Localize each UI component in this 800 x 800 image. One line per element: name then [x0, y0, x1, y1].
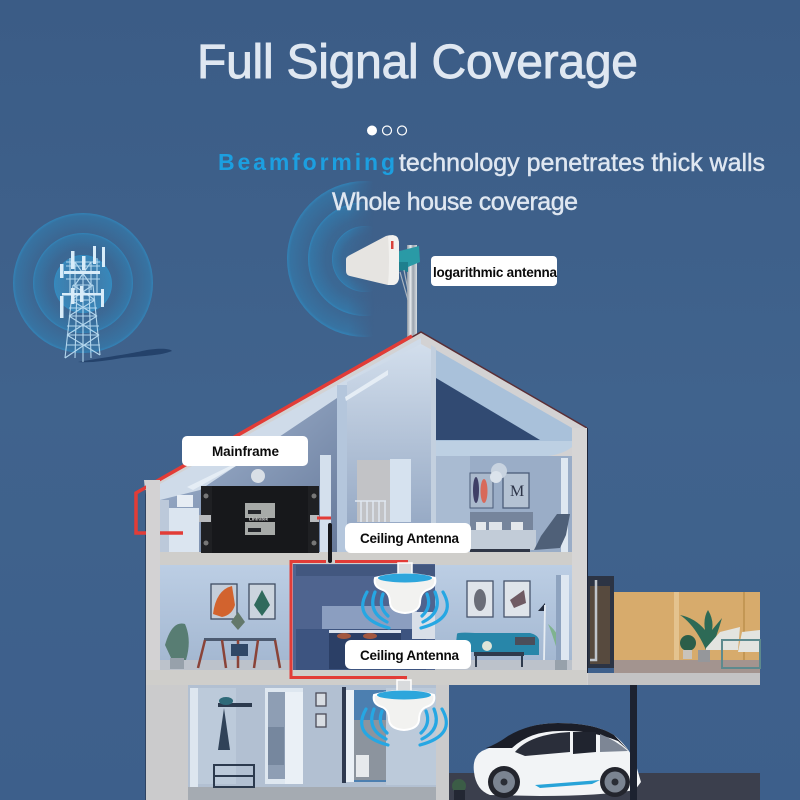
icon: cell tower with signal rings: [13, 213, 172, 362]
mainframe booster unit: [199, 486, 319, 553]
car: [474, 723, 641, 798]
centre room door: [355, 459, 411, 522]
right bedroom: M: [510, 483, 524, 500]
garage support pole: [630, 685, 637, 800]
red cable from mainframe to ceiling antenna: [291, 518, 408, 682]
house cutaway: [136, 332, 760, 800]
label: mainframe: Mainframe: [212, 444, 279, 459]
middle floor: [160, 564, 572, 670]
roof edge: [160, 332, 587, 480]
house shell: [144, 332, 760, 800]
patio: [588, 576, 760, 685]
lamp: [538, 603, 545, 611]
attic: dark triangle: [436, 350, 572, 441]
attic floor slab: [436, 441, 574, 457]
shoe bench: [214, 765, 254, 787]
lower slab: [146, 670, 587, 685]
left wall upper: [146, 480, 160, 685]
attic interior: centre room: [347, 344, 432, 552]
pagination dots: [367, 126, 406, 136]
living art: [467, 581, 493, 617]
label: ceiling antenna lower: Ceiling Antenna: [360, 648, 459, 663]
subtitle line 2: Whole house coverage: [332, 188, 578, 216]
dining set: [165, 623, 189, 660]
label: logarithmic antenna: logarithmic antenna: [433, 265, 557, 280]
patio chairs: [706, 627, 740, 650]
attic interior: left room: [160, 388, 337, 552]
lower left and right walls: [146, 685, 188, 800]
icon: ceiling antenna 1: [363, 563, 447, 628]
coat rack: [218, 703, 252, 707]
window: [561, 575, 569, 660]
kitchen: [293, 564, 435, 670]
patio plant: [680, 610, 722, 650]
icon: ceiling antenna 2: [362, 680, 446, 745]
subtitle line 1: Beamforming: [218, 149, 395, 175]
sofa: [455, 633, 539, 655]
title: Full Signal Coverage: [197, 36, 638, 89]
floor slab upper: [146, 552, 587, 565]
skylight strips: [187, 370, 388, 490]
bathroom door: [342, 687, 346, 783]
wall between rooms: [431, 345, 436, 552]
icon: logarithmic antenna: [346, 235, 420, 337]
signal arcs around logarithmic antenna: [287, 181, 368, 337]
whip antenna: [328, 523, 332, 563]
red cable along roof: [136, 336, 412, 533]
garage floor: [449, 773, 760, 800]
left room furnishing: [160, 455, 331, 552]
subtitle line 1: technology penetrates thick walls: [399, 149, 765, 177]
subtitle line 1: [218, 149, 765, 177]
doorway: [265, 688, 303, 784]
label: ceiling antenna lower: [345, 640, 471, 669]
label: ceiling antenna upper: [345, 523, 471, 553]
plant: [548, 618, 568, 660]
right bedroom: [436, 456, 572, 552]
label: mainframe: [182, 436, 308, 466]
label: logarithmic antenna: [431, 256, 557, 286]
dining art: [211, 584, 237, 619]
central column: [337, 385, 347, 552]
lower floor: [188, 685, 436, 800]
frames: [316, 693, 326, 706]
small planter: [452, 779, 466, 800]
label: ceiling antenna upper: Ceiling Antenna: [360, 531, 459, 546]
mainframe booster unit: Lintratek: [249, 516, 269, 522]
right wall: [572, 428, 587, 673]
